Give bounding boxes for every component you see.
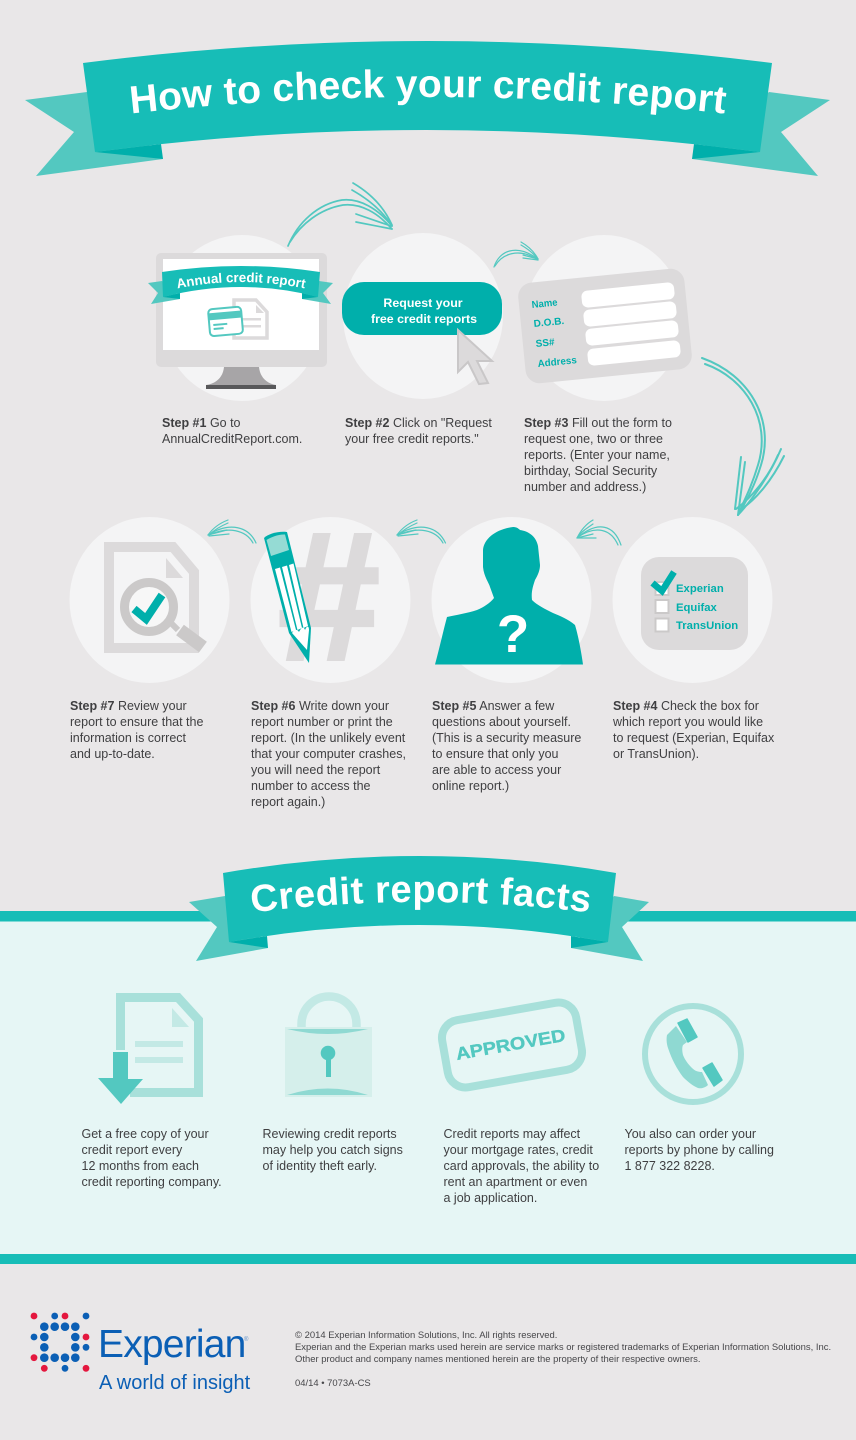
step 4 text: Step #4 Check the box for xyxy=(613,699,759,713)
bureau labels: TransUnion xyxy=(676,620,738,632)
step 6 text: Step #6 Write down your xyxy=(251,699,389,713)
fact 1 text: 12 months from each xyxy=(82,1159,199,1173)
title text: How to check your credit report xyxy=(130,69,726,115)
step 4 text: or TransUnion). xyxy=(613,747,699,761)
step 5 text: online report.) xyxy=(432,779,509,793)
step 3 text: number and address.) xyxy=(524,480,646,494)
title banner xyxy=(25,41,830,176)
step 7 text: information is correct xyxy=(70,731,187,745)
step 3 xyxy=(517,235,693,494)
icon: credit card xyxy=(208,307,243,336)
step 3 text: birthday, Social Security xyxy=(524,464,658,478)
form labels: Address xyxy=(537,355,578,370)
logo dots xyxy=(31,1313,89,1372)
facts banner xyxy=(189,856,649,961)
arrow: step 3 to step 4 xyxy=(702,358,784,515)
circle xyxy=(250,517,410,683)
mini banner xyxy=(148,266,333,304)
registered mark: ® xyxy=(244,1336,249,1343)
step 6 text: you will need the report xyxy=(251,763,381,777)
step 2 text: your free credit reports." xyxy=(345,432,479,446)
request button xyxy=(342,282,502,335)
fact 4 text: 1 877 322 8228. xyxy=(624,1159,715,1173)
step 1 text: AnnualCreditReport.com. xyxy=(162,432,302,446)
fact 1 text: credit reporting company. xyxy=(82,1175,222,1189)
step 6 text: report. (In the unlikely event xyxy=(251,731,406,745)
request button: free credit reports xyxy=(371,312,477,326)
icon: telephone xyxy=(645,1006,741,1102)
icon: approved stamp: APPROVED xyxy=(454,1025,567,1064)
step 7 xyxy=(70,517,230,761)
step 5 text: Step #5 Answer a few xyxy=(432,699,554,713)
form labels xyxy=(531,297,578,370)
Experian logo xyxy=(31,1313,251,1394)
fact 1 text: credit report every xyxy=(82,1143,183,1157)
step 6 text: number to access the xyxy=(251,779,371,793)
fact 2 xyxy=(262,996,403,1173)
form labels: D.O.B. xyxy=(533,316,565,330)
step 3 text: reports. (Enter your name, xyxy=(524,448,670,462)
step 4 text: which report you would like xyxy=(612,715,763,729)
arrow: step 6 to step 7 xyxy=(208,520,256,543)
form labels: SS# xyxy=(535,337,556,350)
circle xyxy=(343,233,503,399)
step 5 text: are able to access your xyxy=(432,763,561,777)
step 6 text: report again.) xyxy=(251,795,325,809)
fact 3 text: your mortgage rates, credit xyxy=(444,1143,593,1157)
icon: document xyxy=(109,547,194,648)
fact 1 text: Get a free copy of your xyxy=(82,1127,209,1141)
fact 2 text: may help you catch signs xyxy=(262,1143,403,1157)
checkbox panel xyxy=(641,557,748,650)
arrow: step 2 to step 3 xyxy=(494,242,538,267)
icon: pencil xyxy=(264,532,311,663)
fact 3 text: card approvals, the ability to xyxy=(444,1159,599,1173)
fact 4 text: reports by phone by calling xyxy=(624,1143,774,1157)
step 2 xyxy=(342,233,503,446)
step 6 text: report number or print the xyxy=(251,715,393,729)
bureau labels xyxy=(676,583,738,632)
facts heading: Credit report facts xyxy=(252,876,590,912)
icon: approved stamp xyxy=(439,1000,585,1090)
legal text: Other product and company names mentioned herein are the property of their respective owners. xyxy=(295,1354,701,1365)
icon: document xyxy=(234,300,267,338)
step 5 text: questions about yourself. xyxy=(432,715,571,729)
icon: cursor xyxy=(458,330,492,384)
step 7 text: Step #7 Review your xyxy=(70,699,187,713)
mini banner text: Annual credit report xyxy=(178,272,306,288)
step 7 text: and up-to-date. xyxy=(70,747,155,761)
fact 3 text: rent an apartment or even xyxy=(444,1175,587,1189)
fact 1 xyxy=(82,998,222,1189)
step 3 text: request one, two or three xyxy=(524,432,663,446)
step 2 text: Step #2 Click on "Request xyxy=(345,416,492,430)
circle xyxy=(70,517,230,683)
step 7 text: report to ensure that the xyxy=(70,715,203,729)
icon: magnifier with check xyxy=(124,582,203,647)
icon: hash sign: # xyxy=(278,494,380,698)
legal text: Experian and the Experian marks used herein are service marks or registered trademarks of Experian Information Solutions, Inc. xyxy=(295,1342,831,1353)
fact 3 xyxy=(439,1000,599,1205)
form card xyxy=(517,267,693,385)
fact 4 xyxy=(624,1006,774,1173)
arrow: step 4 to step 5 xyxy=(577,520,621,545)
step 1 text: Step #1 Go to xyxy=(162,416,241,430)
fact 2 text: of identity theft early. xyxy=(262,1159,377,1173)
question mark: ? xyxy=(497,605,529,664)
bureau labels: Experian xyxy=(676,583,724,595)
fact 3 text: Credit reports may affect xyxy=(444,1127,581,1141)
icon: padlock xyxy=(285,996,372,1097)
panel: credit report facts xyxy=(0,911,856,1264)
tagline: A world of insight xyxy=(99,1372,251,1394)
icon: computer monitor xyxy=(156,253,327,389)
fact 2 text: Reviewing credit reports xyxy=(262,1127,397,1141)
arrow: step 1 to step 2 xyxy=(288,183,392,246)
icon: document download xyxy=(98,998,198,1104)
step 4 text: to request (Experian, Equifax xyxy=(613,731,775,745)
circle xyxy=(162,235,322,401)
step 1 xyxy=(148,235,333,446)
logo wordmark: Experian xyxy=(98,1323,246,1366)
legal text: 04/14 • 7073A-CS xyxy=(295,1378,371,1389)
request button: Request your xyxy=(383,296,463,310)
form labels: Name xyxy=(531,297,559,311)
fact 3 text: a job application. xyxy=(444,1191,537,1205)
step 5 text: to ensure that only you xyxy=(432,747,559,761)
bureau labels: Equifax xyxy=(676,602,718,614)
step 6 xyxy=(250,494,410,809)
step 5 xyxy=(432,517,592,793)
step 4 xyxy=(612,517,775,761)
legal text: © 2014 Experian Information Solutions, Inc. All rights reserved. xyxy=(295,1330,557,1341)
step 6 text: that your computer crashes, xyxy=(251,747,406,761)
arrow: step 5 to step 6 xyxy=(397,520,446,543)
circle xyxy=(524,235,684,401)
icon: person silhouette xyxy=(435,527,583,664)
circle xyxy=(612,517,772,683)
step 3 text: Step #3 Fill out the form to xyxy=(524,416,672,430)
fact 4 text: You also can order your xyxy=(624,1127,756,1141)
step 5 text: (This is a security measure xyxy=(432,731,581,745)
circle xyxy=(432,517,592,683)
